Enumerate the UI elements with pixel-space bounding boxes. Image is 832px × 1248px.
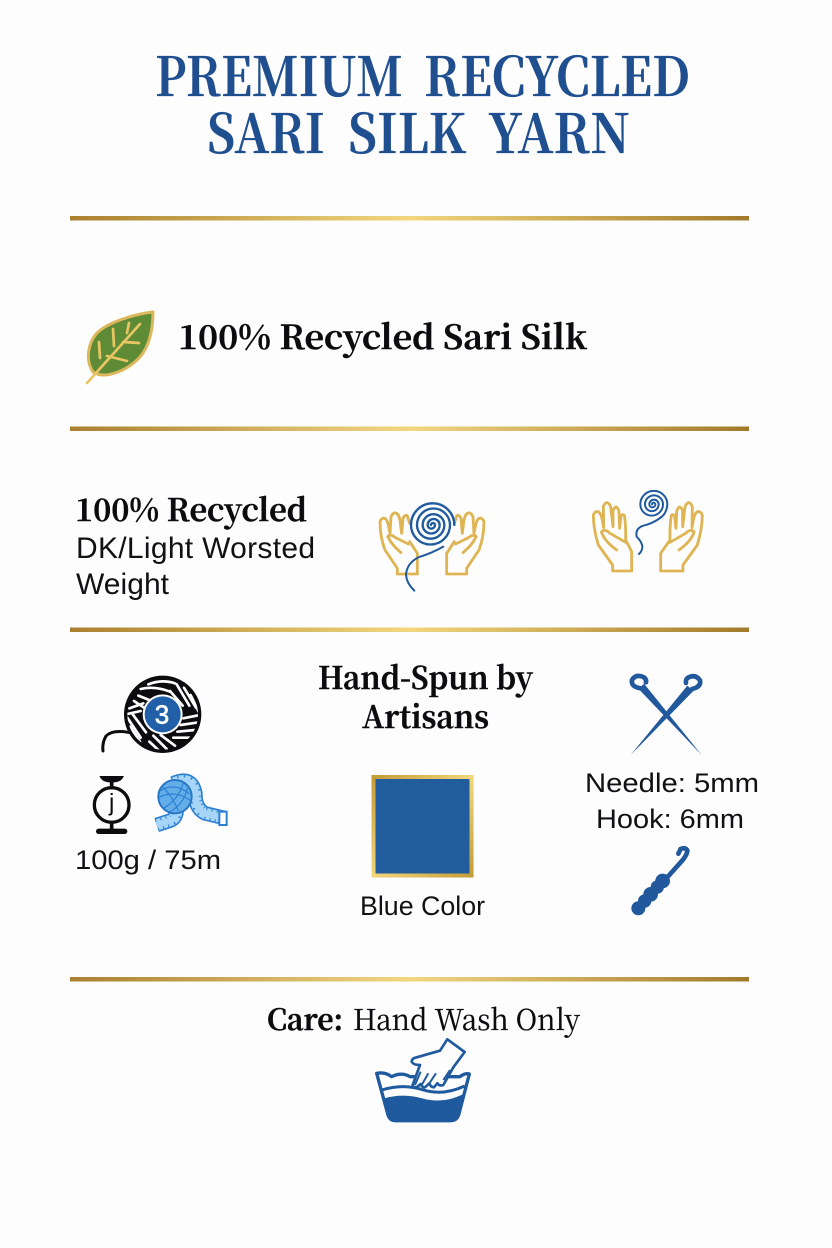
heading: 100% recycled sari silk: 100% Recycled Sari Silk [178,312,588,359]
title: SILK [348,92,467,169]
text: weight and length: 100g / 75m [75,845,221,875]
heading: hand-spun by artisans: Artisans [362,692,489,737]
text: care instructions: Care: [267,998,343,1039]
text: needle and hook sizes [585,768,759,834]
panel: care [267,998,580,1121]
panel: recycled sari silk [87,312,588,383]
text: care instructions: Hand Wash Only [353,998,580,1039]
heading: hand-spun by artisans [318,653,533,737]
title: SARI [207,92,325,169]
heading: hand-spun by artisans: Hand-Spun by [318,653,533,698]
text block: weight: DK/Light Worsted [76,532,315,565]
text: needle and hook sizes: Hook: 6mm [596,804,744,834]
title: PREMIUM [155,35,403,112]
text block: weight: Weight [76,568,170,601]
icon: hand wash basin [377,1039,469,1121]
icon: yarn ball weight 3 [103,676,201,753]
icon: yarn and tape measure [157,780,227,825]
panel: weight and hand spun [75,485,702,601]
title: RECYCLED [424,35,690,112]
icon: crochet hook [631,848,687,915]
infographic page [70,54,758,1122]
title [155,35,690,169]
colour swatch [372,775,474,878]
text: needle and hook sizes: Needle: 5mm [585,768,759,798]
title: YARN [488,92,630,169]
icon: leaf [87,312,153,383]
icon: yarn ball weight 3: 3 [155,700,169,730]
panel: yarn details [75,653,759,921]
icon: scale: j [108,789,114,816]
icon: open hands with yarn spiral [593,491,702,571]
text: blue color: Blue Color [360,891,485,921]
icon: crossed knitting needles [631,676,702,755]
icon: hands holding yarn spiral [380,503,484,591]
icon: scale [94,776,129,834]
text block: weight: 100% Recycled [75,485,307,530]
text block: weight [75,485,315,601]
